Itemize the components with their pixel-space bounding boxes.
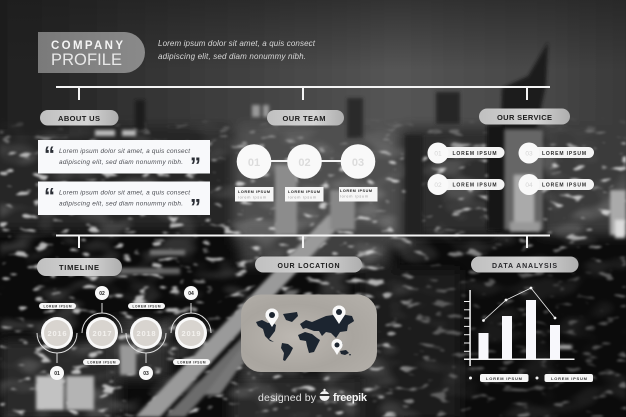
timeline 2017: LOREM IPSUM: [88, 360, 116, 364]
timeline 2019: [171, 286, 211, 365]
quote card 2: adipiscing elit, sed diam nonummy nibh.: [59, 200, 183, 208]
map pin: [332, 339, 342, 355]
team member 03: 03: [352, 157, 364, 169]
quote card 2: [38, 182, 210, 220]
timeline 2017: 02: [99, 291, 105, 297]
city light speckle: [0, 100, 626, 417]
bars: [478, 300, 560, 359]
service 02: LOREM IPSUM: [452, 182, 496, 188]
panel: our location map: [241, 294, 377, 372]
service 01: [428, 142, 504, 164]
heading: our team: OUR TEAM: [282, 114, 326, 123]
map pin: [332, 306, 346, 324]
timeline 2018: [126, 303, 166, 380]
icon: freepik mascot: [319, 389, 330, 401]
heading: timeline: [37, 258, 122, 276]
timeline 2018: 2018: [136, 329, 156, 338]
service 01: 01: [434, 150, 442, 158]
timeline 2016: [37, 303, 77, 380]
panel: our team: [235, 144, 378, 202]
heading: our team: [267, 110, 344, 126]
quote card 1: “: [44, 142, 55, 167]
chart axes: [464, 290, 574, 366]
trend line: [482, 287, 556, 322]
quote card 1: adipiscing elit, sed diam nonummy nibh.: [59, 159, 183, 166]
bottom connector line: [56, 234, 550, 248]
service 04: [518, 174, 594, 195]
panel: our service: [428, 142, 594, 195]
service 03: [518, 142, 594, 164]
team member 02: 02: [298, 157, 311, 169]
service 03: LOREM IPSUM: [542, 151, 586, 157]
heading: timeline: TIMELINE: [59, 263, 99, 272]
team member 01: LOREM IPSUM: [238, 190, 270, 194]
legend item 1: LOREM IPSUM: [486, 376, 523, 381]
timeline 2019: 2019: [182, 329, 200, 338]
quote card 1: [38, 140, 210, 178]
team member 03: lorem ipsum: [340, 194, 368, 198]
timeline 2018: LOREM IPSUM: [132, 304, 161, 308]
intro text: [158, 39, 316, 61]
heading: data analysis: DATA ANALYSIS: [492, 263, 557, 270]
timeline 2017: [82, 286, 122, 365]
timeline 2016: 2016: [48, 329, 66, 338]
service 04: LOREM IPSUM: [542, 182, 586, 188]
service 04: 04: [525, 182, 533, 189]
timeline 2019: 04: [188, 291, 194, 297]
timeline 2016: LOREM IPSUM: [44, 304, 72, 308]
map pin: [266, 308, 278, 327]
team member 03: [339, 144, 378, 202]
panel: timeline: [37, 286, 211, 380]
legend item 2: LOREM IPSUM: [551, 376, 588, 381]
team member 02: [285, 144, 324, 202]
freepik credit: designed by: [258, 392, 317, 404]
team member 02: lorem ipsum: [288, 196, 316, 200]
timeline 2017: 2017: [92, 329, 112, 338]
title badge: [38, 32, 145, 73]
panel: about us quotes: [38, 140, 210, 220]
title badge: PROFILE: [51, 51, 122, 69]
service 02: [428, 174, 504, 195]
team member 01: 01: [248, 157, 260, 169]
quote card 2: Lorem ipsum dolor sit amet, a quis consect: [59, 190, 190, 196]
freepik credit: [258, 389, 368, 404]
heading: about us: [40, 110, 118, 126]
service 03: 03: [525, 150, 533, 158]
quote card 2: ”: [190, 194, 201, 220]
service 01: LOREM IPSUM: [452, 151, 496, 157]
world map: [256, 312, 354, 361]
heading: data analysis: [471, 256, 578, 272]
intro text: adipiscing elit, sed diam nonummy nibh.: [158, 52, 306, 61]
quote card 2: “: [44, 184, 55, 208]
heading: our service: OUR SERVICE: [497, 113, 552, 122]
team member 03: LOREM IPSUM: [340, 189, 372, 193]
team member 01: lorem ipsum: [238, 196, 266, 200]
team member 01: [235, 144, 274, 202]
freepik credit: freepik: [333, 392, 368, 404]
quote card 1: Lorem ipsum dolor sit amet, a quis consect: [59, 148, 190, 155]
title badge: COMPANY: [51, 40, 123, 52]
heading: our location: [255, 256, 362, 272]
timeline 2018: 03: [143, 371, 149, 377]
intro text: Lorem ipsum dolor sit amet, a quis consect: [158, 39, 316, 48]
heading: about us: ABOUT US: [58, 114, 100, 123]
heading: our service: [479, 108, 570, 124]
service 02: 02: [434, 182, 442, 189]
quote card 1: ”: [190, 153, 201, 178]
timeline 2019: LOREM IPSUM: [178, 360, 206, 364]
timeline 2016: 01: [54, 371, 60, 377]
panel: data analysis chart: [464, 287, 593, 382]
heading: our location: OUR LOCATION: [278, 263, 340, 270]
team member 02: LOREM IPSUM: [288, 190, 320, 194]
top connector line: [56, 86, 550, 100]
